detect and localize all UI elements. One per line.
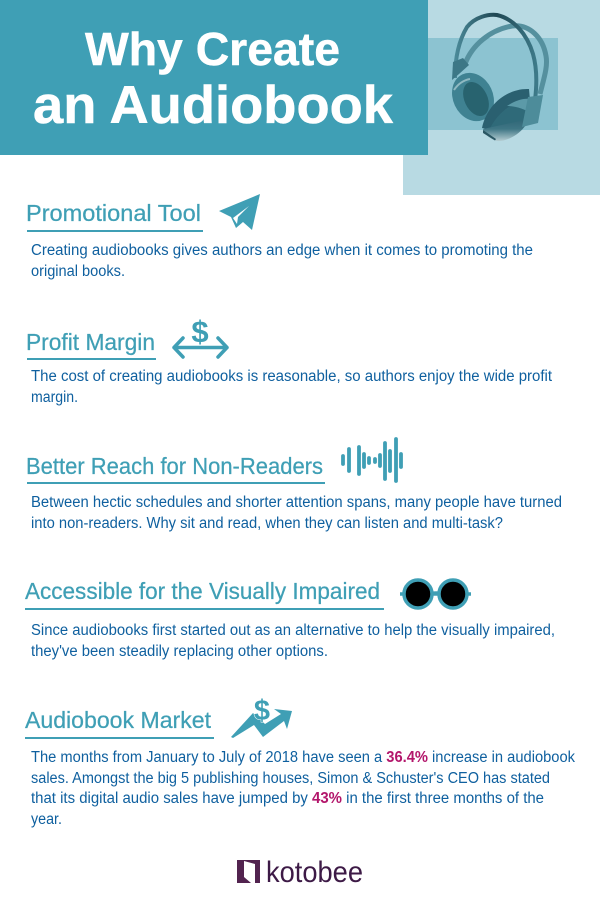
text: visually impaired (31, 622, 555, 660)
icon: headphones (444, 15, 547, 141)
icon: rising arrow with dollar (231, 695, 292, 738)
section: promotional tool (26, 194, 533, 280)
text: audiobook market: that its digital audio sales have jumped by 43% in the first three months of the (31, 790, 544, 807)
heading: better reach: Better Reach for Non-Readers (26, 453, 323, 479)
text: visually impaired: they've been steadily replacing other options. (31, 643, 328, 660)
text: audiobook market (31, 749, 575, 828)
icon: dollar with arrows: $ (191, 314, 209, 349)
icon: paper plane (219, 194, 260, 230)
text: better reach (31, 494, 562, 532)
panel: header (0, 0, 600, 195)
text: better reach: into non-readers. Why sit and read, when they can listen and multi-task? (31, 515, 503, 532)
title (33, 23, 394, 135)
text: audiobook market: sales. Amongst the big 5 publishing houses, Simon & Schuster's CEO has stated (31, 770, 550, 787)
section: profit margin (26, 314, 553, 406)
heading: profit margin: Profit Margin (26, 329, 155, 355)
text: better reach: Between hectic schedules and shorter attention spans, many people have turned (31, 494, 562, 511)
icon: rising arrow with dollar: $ (254, 695, 270, 727)
text: promotional tool: original books. (31, 263, 125, 280)
section: better reach (26, 439, 562, 532)
text: audiobook market: year. (31, 811, 62, 828)
text: promotional tool: Creating audiobooks gives authors an edge when it comes to promoting the (31, 242, 533, 259)
text: profit margin: margin. (31, 389, 78, 406)
text: promotional tool (31, 242, 533, 280)
title: Why Create (85, 23, 340, 75)
heading: audiobook market: Audiobook Market (25, 707, 212, 733)
icon: sunglasses (400, 580, 471, 608)
text: profit margin (31, 368, 553, 406)
text: visually impaired: Since audiobooks first started out as an alternative to help the visually impaired, (31, 622, 555, 639)
logo: kotobee: kotobee (266, 856, 363, 889)
section: visually impaired (25, 578, 555, 660)
icon: dollar with arrows (174, 314, 227, 357)
heading: promotional tool: Promotional Tool (26, 200, 201, 226)
heading: visually impaired: Accessible for the Visually Impaired (25, 578, 380, 604)
section: audiobook market (25, 695, 575, 828)
text: audiobook market: The months from January to July of 2018 have seen a 36.4% increase in audiobook (31, 749, 575, 766)
icon: sound wave (343, 439, 401, 481)
text: profit margin: The cost of creating audiobooks is reasonable, so authors enjoy the wide profit (31, 368, 553, 385)
title: an Audiobook (33, 76, 394, 135)
